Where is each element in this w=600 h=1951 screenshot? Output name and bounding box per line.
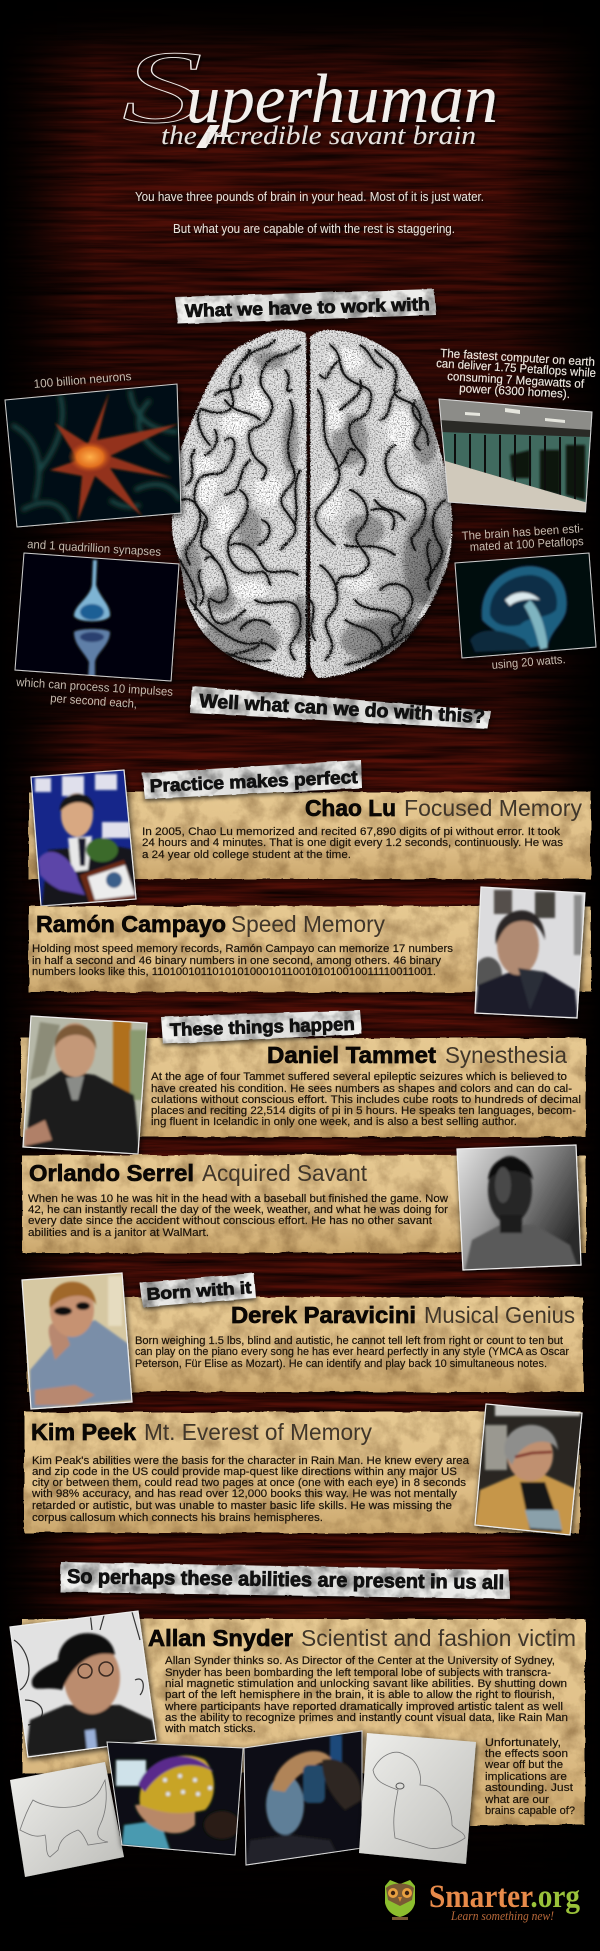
body text: ing fluent in Icelandic in only one week, and is also a best selling author. <box>151 1116 517 1128</box>
body text <box>142 826 564 861</box>
heading: Chao Lu Focused Memory <box>305 795 582 821</box>
heading: Chao Lu Focused Memory: Chao Lu <box>305 795 396 821</box>
title: S <box>122 30 203 145</box>
heading label: what we have to work with: What we have to work with <box>185 294 430 321</box>
body text: Born weighing 1.5 lbs, blind and autistic, he cannot tell left from right or count to ten but <box>135 1335 563 1347</box>
photo: Chao Lu <box>31 770 136 906</box>
body text: places and reciting 22,514 digits of pi in 5 hours. He speaks ten languages, becom- <box>151 1105 576 1117</box>
heading: Kim Peek Mt. Everest of Memory: Kim Peek <box>31 1419 136 1445</box>
body text <box>28 1193 448 1239</box>
brain illustration <box>165 325 460 685</box>
body text: with match sticks. <box>164 1723 256 1735</box>
body text: 42, he can instantly recall the day of the week, weather, and what he was doing for <box>28 1204 448 1216</box>
body text: Kim Peak's abilities were the basis for the character in Rain Man. He knew every area <box>32 1455 470 1467</box>
body text: culations without conscious effort. This includes cube roots to hundreds of decimal <box>151 1094 581 1106</box>
panel paper <box>24 1412 580 1533</box>
heading: Chao Lu Focused Memory: Focused Memory <box>404 795 582 821</box>
body text: where participants have reported dramatically improved artistic talent as well <box>164 1701 563 1713</box>
body text: as the ability to recognize primes and instantly count visual data, like Rain Man <box>165 1712 568 1724</box>
sketch: dog after stimulation <box>359 1733 476 1864</box>
body text: Snyder has been bombarding the left temporal lobe of subjects with transcra- <box>165 1667 551 1679</box>
heading label: well what can we do with this: Well what can we do with this? <box>199 691 485 728</box>
panel paper <box>29 906 591 992</box>
heading: Orlando Serrel Acquired Savant: Orlando Serrel <box>29 1160 194 1186</box>
caption: synapses: and 1 quadrillion synapses <box>27 537 161 559</box>
heading: Daniel Tammet Synesthesia: Synesthesia <box>445 1042 567 1068</box>
panel: Kim Peek <box>24 1412 580 1533</box>
photo: subject wearing EEG cap <box>107 1742 243 1855</box>
body text: numbers looks like this, 1101001011010101000101100101010010011110011001. <box>32 966 436 978</box>
photo: synapse <box>15 553 179 681</box>
logo: Smarter.org wordmark: Learn something new! <box>450 1908 554 1923</box>
caption: process 10 impulses: per second each, <box>50 691 138 711</box>
body text: a 24 year old college student at the time. <box>142 849 351 861</box>
body text <box>32 943 454 978</box>
caption: fastest computer <box>436 346 597 401</box>
label: practice makes perfect <box>142 760 362 799</box>
panel: Daniel Tammet <box>21 1038 586 1137</box>
body text: every date since the accident without conscious effort. He has no other savant <box>28 1215 432 1227</box>
photo: supercomputer <box>439 399 592 515</box>
body text: in half a second and 46 binary numbers in one second, among others. 46 binary <box>32 955 442 967</box>
heading: Derek Paravicini Musical Genius <box>231 1302 575 1328</box>
intro text: You have three pounds of brain in your head. Most of it is just water. <box>135 190 484 204</box>
body text: and zip code in the US could provide map-quest like directions within any major US <box>32 1466 457 1478</box>
title: the incredible savant brain <box>161 121 476 150</box>
photo: neuron <box>5 384 181 527</box>
body text: can play on the piano every song he has ever heard perfectly in any style (YMCA as Oscar <box>135 1346 569 1358</box>
intro text <box>135 190 484 236</box>
body text: Peterson, Für Elise as Mozart). He can identify and play back 10 simultaneous notes. <box>135 1358 547 1370</box>
heading: Ramón Campayo Speed Memory <box>36 911 385 937</box>
label: born with it: Born with it <box>146 1278 252 1304</box>
heading: Daniel Tammet Synesthesia <box>267 1042 567 1068</box>
photo: subject receiving magnetic stimulation <box>244 1731 362 1865</box>
body text <box>135 1335 569 1370</box>
side text: Unfortunately, <box>485 1737 561 1749</box>
body text: nial magnetic stimulation and unlocking savant like abilities. By shutting down <box>165 1678 567 1690</box>
side text <box>484 1737 575 1817</box>
panel: Orlando Serrel <box>22 1155 586 1253</box>
photo: Daniel Tammet <box>23 1016 148 1155</box>
body text <box>164 1655 568 1735</box>
heading: Derek Paravicini Musical Genius: Derek Paravicini <box>231 1302 416 1328</box>
logo: owl <box>385 1880 415 1920</box>
heading label: what we have to work with <box>175 289 436 324</box>
sketch: dog before stimulation <box>10 1762 124 1877</box>
side text: astounding. Just <box>485 1782 573 1794</box>
body text: part of the left hemisphere in the brain, it is able to allow the right to flourish, <box>165 1689 555 1701</box>
label: practice makes perfect: Practice makes perfect <box>149 767 358 796</box>
body text: with 98% accuracy, and has read over 12,000 books this way. He was not mentally <box>31 1488 458 1500</box>
side text: what are our <box>484 1794 549 1806</box>
heading: Orlando Serrel Acquired Savant: Acquired Savant <box>202 1160 368 1186</box>
logo: Smarter.org wordmark: Smarter.org <box>429 1879 580 1915</box>
panel: Allan Snyder <box>22 1619 585 1825</box>
side text: implications are <box>485 1771 567 1783</box>
body text: have created his condition. He sees numbers as shapes and colors and can do cal- <box>151 1083 572 1095</box>
heading: Ramón Campayo Speed Memory: Speed Memory <box>231 911 385 937</box>
caption: using 20 watts: using 20 watts. <box>491 652 566 672</box>
panel paper <box>21 1038 586 1137</box>
side text: wear off but the <box>484 1759 563 1771</box>
panel paper <box>22 1155 586 1253</box>
caption: 100 billion neurons: 100 billion neurons <box>33 369 132 391</box>
photo: Allan Snyder <box>10 1611 158 1757</box>
photo: Kim Peek <box>475 1404 582 1536</box>
caption: brain estimated <box>461 521 584 554</box>
title <box>122 30 498 150</box>
caption: brain estimated: mated at 100 Petaflops <box>469 534 584 554</box>
body text: corpus callosum which connects his brains hemispheres. <box>32 1512 323 1524</box>
heading: Allan Snyder Scientist and fashion victim: Allan Snyder <box>148 1625 293 1651</box>
caption: process 10 impulses <box>15 675 173 711</box>
body text: retarded or autistic, but was unable to master basic life skills. He was missing the <box>32 1500 452 1512</box>
photo: brain scan <box>455 553 596 658</box>
intro text: But what you are capable of with the rest is staggering. <box>173 222 455 236</box>
body text: In 2005, Chao Lu memorized and recited 67,890 digits of pi without error. It took <box>142 826 561 838</box>
body text: city or between them, could read two pages at once (one with each eye) in 8 seconds <box>32 1477 467 1489</box>
panel: Chao Lu <box>29 792 591 879</box>
photo: Ramón Campayo <box>474 887 585 1018</box>
body text: Allan Synder thinks so. As Director of the Center at the University of Sydney, <box>165 1655 555 1667</box>
body text <box>31 1455 470 1524</box>
heading: Daniel Tammet Synesthesia: Daniel Tammet <box>267 1042 436 1068</box>
panel paper <box>29 792 591 879</box>
caption: fastest computer: power (6300 homes). <box>459 381 570 401</box>
label: these things happen: These things happen <box>169 1014 355 1040</box>
body text <box>151 1071 581 1128</box>
caption: fastest computer: consuming 7 Megawatts of <box>447 369 585 391</box>
body text: At the age of four Tammet suffered several epileptic seizures which is believed to <box>151 1071 567 1083</box>
label: born with it <box>140 1273 256 1307</box>
caption: brain estimated: The brain has been esti- <box>461 521 584 543</box>
heading: Ramón Campayo Speed Memory: Ramón Campayo <box>36 911 226 937</box>
panel paper <box>22 1619 585 1825</box>
heading: Allan Snyder Scientist and fashion victim <box>148 1625 576 1651</box>
heading: Kim Peek Mt. Everest of Memory: Mt. Everest of Memory <box>144 1419 372 1445</box>
panel paper <box>27 1297 583 1392</box>
heading label: so perhaps these abilities are present in us all: So perhaps these abilities are present in us all <box>67 1566 504 1594</box>
side text: brains capable of? <box>485 1805 575 1817</box>
photo: Orlando Serrel <box>457 1145 581 1270</box>
photo: Derek Paravicini <box>22 1273 134 1409</box>
heading: Allan Snyder Scientist and fashion victim: Scientist and fashion victim <box>301 1625 576 1651</box>
caption: process 10 impulses: which can process 10 impulses <box>15 675 173 699</box>
body text: abilities and is a janitor at WalMart. <box>28 1227 209 1239</box>
body text: 24 hours and 4 minutes. That is one digit every 1.2 seconds, continuously. He was <box>142 837 564 849</box>
label: these things happen <box>161 1010 362 1044</box>
heading: Kim Peek Mt. Everest of Memory <box>31 1419 372 1445</box>
panel: Derek Paravicini <box>27 1297 583 1392</box>
heading: Orlando Serrel Acquired Savant <box>29 1160 368 1186</box>
body text: When he was 10 he was hit in the head with a baseball but finished the game. Now <box>28 1193 448 1205</box>
heading: Derek Paravicini Musical Genius: Musical Genius <box>424 1302 575 1328</box>
side text: the effects soon <box>485 1748 568 1760</box>
body text: Holding most speed memory records, Ramón Campayo can memorize 17 numbers <box>32 943 454 955</box>
title: uperhuman <box>186 61 498 138</box>
panel: Ramón Campayo <box>29 906 591 992</box>
caption: fastest computer: The fastest computer on earth <box>440 346 595 369</box>
